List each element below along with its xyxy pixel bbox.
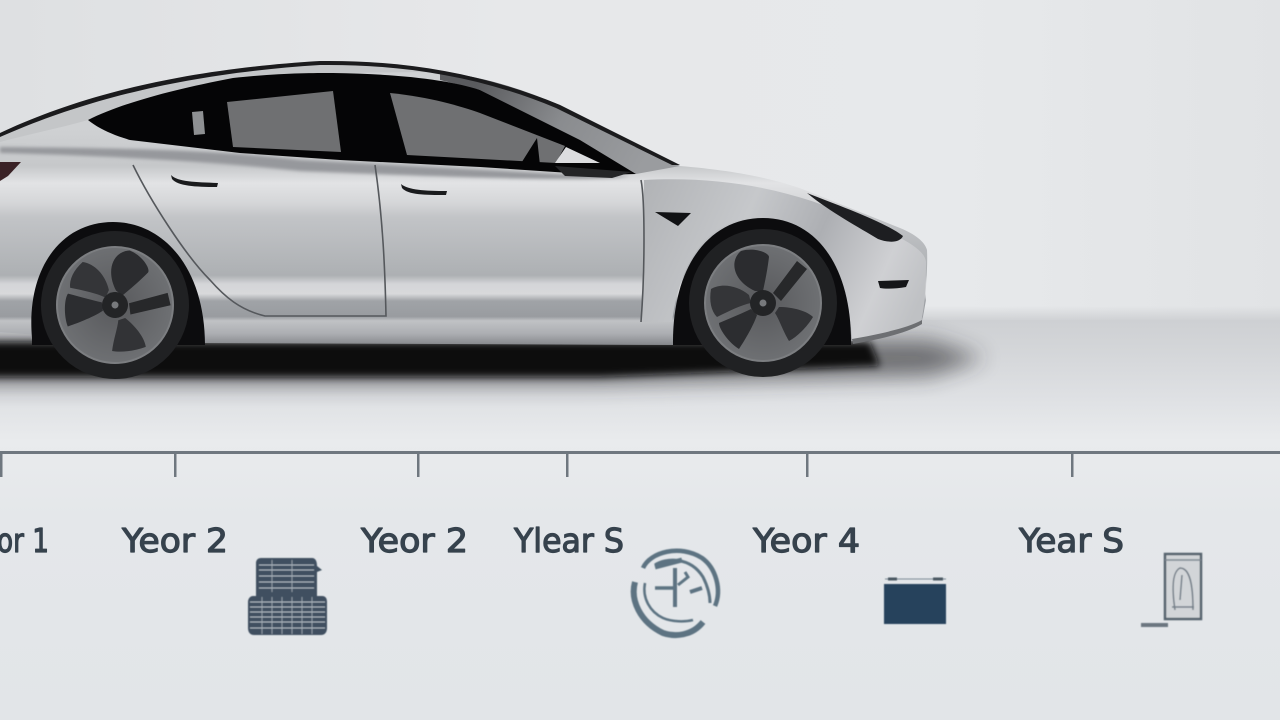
door handles bbox=[171, 175, 447, 195]
side marker bbox=[655, 212, 691, 226]
label: year 4: Yeor 4 bbox=[752, 521, 860, 560]
front lip shadow bbox=[852, 320, 922, 344]
quarter glass bbox=[192, 111, 205, 135]
floor bbox=[0, 306, 1280, 720]
label: year 3: Ylear S bbox=[513, 521, 624, 560]
rear window pane bbox=[227, 91, 341, 152]
front fender bbox=[642, 179, 926, 341]
label: year 2: Yeor 2 bbox=[121, 521, 228, 560]
timeline axis bbox=[0, 451, 1280, 477]
mirror stalk bbox=[520, 138, 540, 165]
icon: circular gauge bbox=[634, 551, 718, 635]
icon: charger panel bbox=[1141, 554, 1201, 627]
roof silver band bbox=[0, 63, 430, 142]
a-pillar band bbox=[440, 72, 680, 174]
mirror bbox=[555, 166, 632, 178]
background wall bbox=[0, 0, 1280, 330]
car ground shadow bbox=[0, 340, 985, 384]
car body bbox=[0, 61, 927, 345]
front wheel bbox=[689, 229, 837, 377]
car bbox=[0, 61, 985, 409]
mirror glass bbox=[555, 147, 600, 163]
front wheel arch bbox=[673, 218, 851, 345]
shoulder highlight bbox=[0, 147, 630, 179]
tail light bbox=[0, 162, 21, 181]
headlight bbox=[807, 193, 903, 242]
icon: battery modules bbox=[248, 558, 327, 635]
rear wheel arch bbox=[31, 222, 205, 345]
front window pane bbox=[390, 93, 565, 163]
door seams bbox=[133, 165, 644, 322]
roof edge bbox=[0, 61, 680, 165]
label: year 5: Year S bbox=[1018, 521, 1124, 560]
windows bbox=[88, 73, 636, 175]
rear wheel bbox=[11, 201, 219, 409]
label: year 2 second: Yeor 2 bbox=[360, 521, 468, 560]
year labels bbox=[0, 521, 1124, 560]
icon: battery block bbox=[884, 579, 946, 624]
front vent bbox=[878, 280, 909, 289]
